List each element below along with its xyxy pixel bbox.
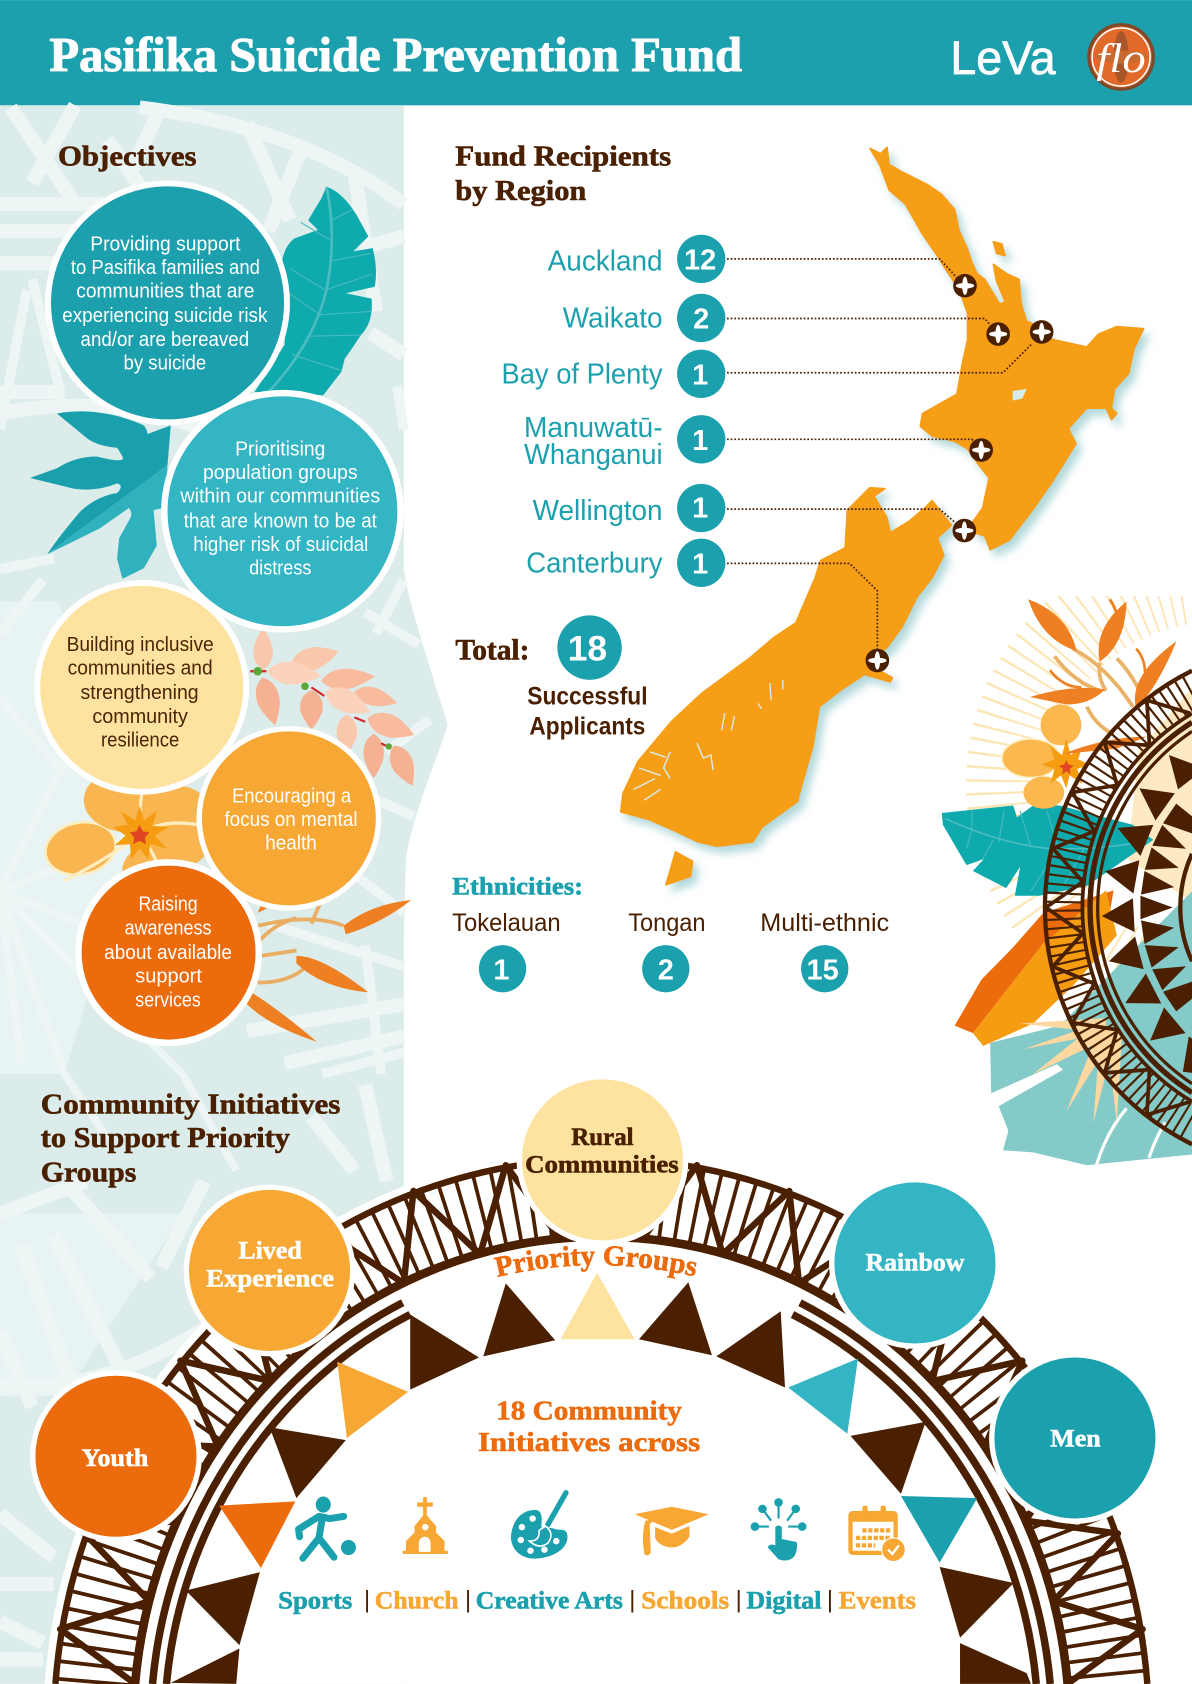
map: southern lakes and fiords: [634, 680, 783, 800]
objective circle 1: by suicide: [123, 352, 206, 374]
mandala outer triangles: [1102, 755, 1192, 1073]
circle: Men: [989, 1352, 1161, 1524]
heading: Objectives: Objectives: [58, 140, 197, 172]
region list with counts: Auckland: [548, 246, 663, 278]
heading: Community Initiatives: Community Initiatives: [41, 1089, 340, 1121]
teal banana leaf: [942, 805, 1153, 896]
total recipients: [455, 615, 648, 741]
region list with counts: 1: [692, 425, 708, 457]
map: South Island: [621, 488, 951, 846]
circle: Lived Experience: [184, 1185, 355, 1356]
objective circle 2: within our communities: [179, 486, 380, 508]
total recipients: Successful: [527, 684, 648, 711]
heading: Fund Recipients by Region: [455, 140, 671, 207]
dotted connector lines: [727, 259, 1032, 661]
initiative categories: Sports: [278, 1586, 352, 1615]
objective circle 1: and/or are bereaved: [81, 329, 249, 351]
arch inner ring left: [152, 1303, 410, 1684]
region list with counts: [501, 235, 725, 587]
left pale patterned panel: [0, 105, 448, 1684]
objective circle 2: higher risk of suicidal: [193, 534, 368, 556]
objective circle 4: Encouraging a: [232, 785, 352, 807]
priority groups arc label: Priority Groups: [493, 1246, 697, 1279]
objective circle 1: Providing support: [90, 233, 241, 255]
heading: Fund Recipients by Region: Fund Recipients: [455, 140, 671, 172]
heliconia flowers: [1028, 599, 1177, 754]
region list with counts: Waikato: [563, 303, 663, 335]
objective circle 2: that are known to be at: [184, 510, 377, 532]
decorative flower: bird of paradise, left: [247, 886, 411, 1042]
decorative flower: plumeria: [41, 768, 215, 894]
map: Lake Taupo: [1013, 389, 1027, 401]
circle: Rainbow: [829, 1177, 1001, 1349]
right decorative cluster behind mandala: [942, 581, 1192, 1165]
region list with counts: Wellington: [533, 495, 663, 527]
ethnicities: [452, 872, 889, 992]
region list with counts: 12: [684, 245, 716, 277]
initiative categories: Church: [375, 1586, 459, 1615]
map of New Zealand: [621, 147, 1144, 885]
objective circle 5: services: [135, 989, 201, 1011]
orange plumeria: [1002, 705, 1090, 809]
initiative categories: [278, 1586, 916, 1615]
ethnicities: 1: [493, 954, 510, 986]
total recipients: Applicants: [529, 714, 645, 741]
arch white base: [45, 1148, 1158, 1684]
mandala inner triangles: [1140, 804, 1192, 1011]
decorative leaf: banana: [255, 187, 376, 395]
ethnicities: Tongan: [628, 910, 706, 937]
objective circle 1: [45, 180, 290, 425]
objective circle 3: [34, 580, 249, 795]
initiative categories: |: [364, 1588, 370, 1614]
objective circle 5: [75, 859, 262, 1046]
bunting triangles: [171, 1273, 1031, 1684]
initiative categories: Creative Arts: [476, 1586, 623, 1615]
arch hatch band: [95, 1197, 1107, 1684]
decorative leaf: split: [30, 411, 171, 579]
region list with counts: Whanganui: [524, 439, 663, 471]
initiative categories: |: [465, 1588, 471, 1614]
mandala zigzag: [1046, 700, 1190, 1115]
ethnicities: Ethnicities:: [452, 872, 583, 901]
icon: digital pointer: [751, 1499, 806, 1561]
map markers: [866, 274, 1053, 672]
region list with counts: 1: [692, 493, 708, 525]
heading: Community Initiatives: Groups: [41, 1156, 136, 1188]
heading: Community Initiatives: to Support Priority: [41, 1122, 290, 1154]
objective circle 1: to Pasifika families and: [71, 257, 260, 279]
initiative categories: |: [827, 1588, 833, 1614]
circle: Men: Men: [1050, 1424, 1101, 1453]
objective circle 4: [197, 726, 381, 911]
objective circle 5: about available: [104, 942, 232, 964]
circle: Youth: [30, 1370, 202, 1542]
objective circle 2: population groups: [203, 462, 358, 484]
orange banana leaf: [955, 890, 1114, 1033]
total recipients: 18: [568, 629, 607, 669]
map: Stewart Island: [666, 852, 693, 885]
objective circle 3: communities and: [68, 657, 213, 679]
objective circle 5: Raising: [139, 894, 198, 916]
objective circle 3: resilience: [101, 729, 179, 751]
objective circle 5: support: [135, 966, 202, 988]
circle: Lived Experience: Lived: [238, 1236, 302, 1265]
region list with counts: 1: [692, 549, 708, 581]
heading: Fund Recipients by Region: by Region: [455, 175, 586, 207]
objective circle 4: health: [265, 833, 317, 855]
arch outer line: [55, 1159, 1147, 1684]
patterned arch: [45, 1148, 1158, 1684]
heading: 18 Community Initiatives across: 18 Community: [496, 1396, 682, 1427]
icon: church: [403, 1497, 448, 1554]
heading: Community Initiatives: [41, 1089, 340, 1188]
ethnicities: Tokelauan: [452, 910, 561, 937]
circle: Rainbow: Rainbow: [866, 1247, 965, 1276]
logo: flo: [1089, 25, 1153, 89]
circle: Rural Communities: Rural: [571, 1122, 634, 1151]
circle: Youth: Youth: [82, 1443, 148, 1472]
monstera vein cut: [1096, 1108, 1165, 1165]
region list with counts: 1: [692, 360, 708, 392]
map: North Island: [870, 147, 1144, 550]
heading: 18 Community Initiatives across: [478, 1396, 700, 1458]
region list with counts: Manuwatū-: [524, 412, 663, 444]
amber banana leaf: [973, 890, 1117, 1046]
objective circle 1: communities that are: [76, 281, 255, 303]
objective circle 2: Prioritising: [235, 438, 325, 460]
cream spiky fronds: [1020, 1018, 1122, 1123]
region list with counts: Canterbury: [526, 547, 663, 579]
arch zigzag: [60, 1157, 1143, 1684]
arch inner ring right: [793, 1303, 1050, 1684]
initiative categories: |: [629, 1588, 635, 1614]
ethnicities: 2: [658, 954, 674, 986]
objective circle 1: experiencing suicide risk: [62, 305, 267, 327]
decorative flower: pink blossoms: [250, 628, 422, 790]
objective circle 3: community: [92, 706, 188, 728]
mandala hatch band: [1063, 691, 1192, 1124]
objective circle 2: distress: [249, 558, 311, 580]
mandala rings: [1045, 671, 1192, 1144]
heading: 18 Community Initiatives across: Initiatives across: [478, 1427, 700, 1458]
total recipients: Total:: [455, 632, 529, 666]
icon: graduation cap: [635, 1507, 709, 1555]
mandala on right edge: [1045, 671, 1192, 1144]
arch band inner line: [135, 1237, 1068, 1684]
ethnicities: Multi-ethnic: [760, 910, 889, 937]
icon: calendar: [848, 1506, 905, 1561]
ethnicities: 15: [806, 954, 839, 986]
objective circle 3: Building inclusive: [67, 634, 214, 656]
circle: Rural Communities: [517, 1074, 688, 1246]
map: Great Barrier Island: [993, 242, 1005, 256]
header band: [0, 0, 1192, 105]
logo: Le Va: LeVa: [950, 32, 1056, 85]
circle: Lived Experience: Experience: [206, 1264, 334, 1293]
objective circle 3: strengthening: [81, 682, 199, 704]
initiative categories: Events: [839, 1586, 916, 1615]
objective circle 2: [161, 390, 404, 633]
circle: Rural Communities: Communities: [525, 1150, 679, 1179]
objective circle 5: awareness: [125, 917, 212, 939]
icon: sports player: [299, 1497, 356, 1558]
region list with counts: Bay of Plenty: [501, 358, 663, 390]
title: Pasifika Suicide Prevention Fund: [49, 29, 742, 82]
initiative categories: Schools: [641, 1586, 729, 1615]
pale teal monstera leaf: [990, 891, 1192, 1165]
initiative categories: |: [736, 1588, 742, 1614]
initiative categories: Digital: [746, 1586, 822, 1615]
icon: palette and brush: [511, 1493, 567, 1559]
logo: flo: flo: [1096, 36, 1146, 81]
region list with counts: 2: [693, 304, 709, 336]
objective circle 4: focus on mental: [224, 809, 358, 831]
